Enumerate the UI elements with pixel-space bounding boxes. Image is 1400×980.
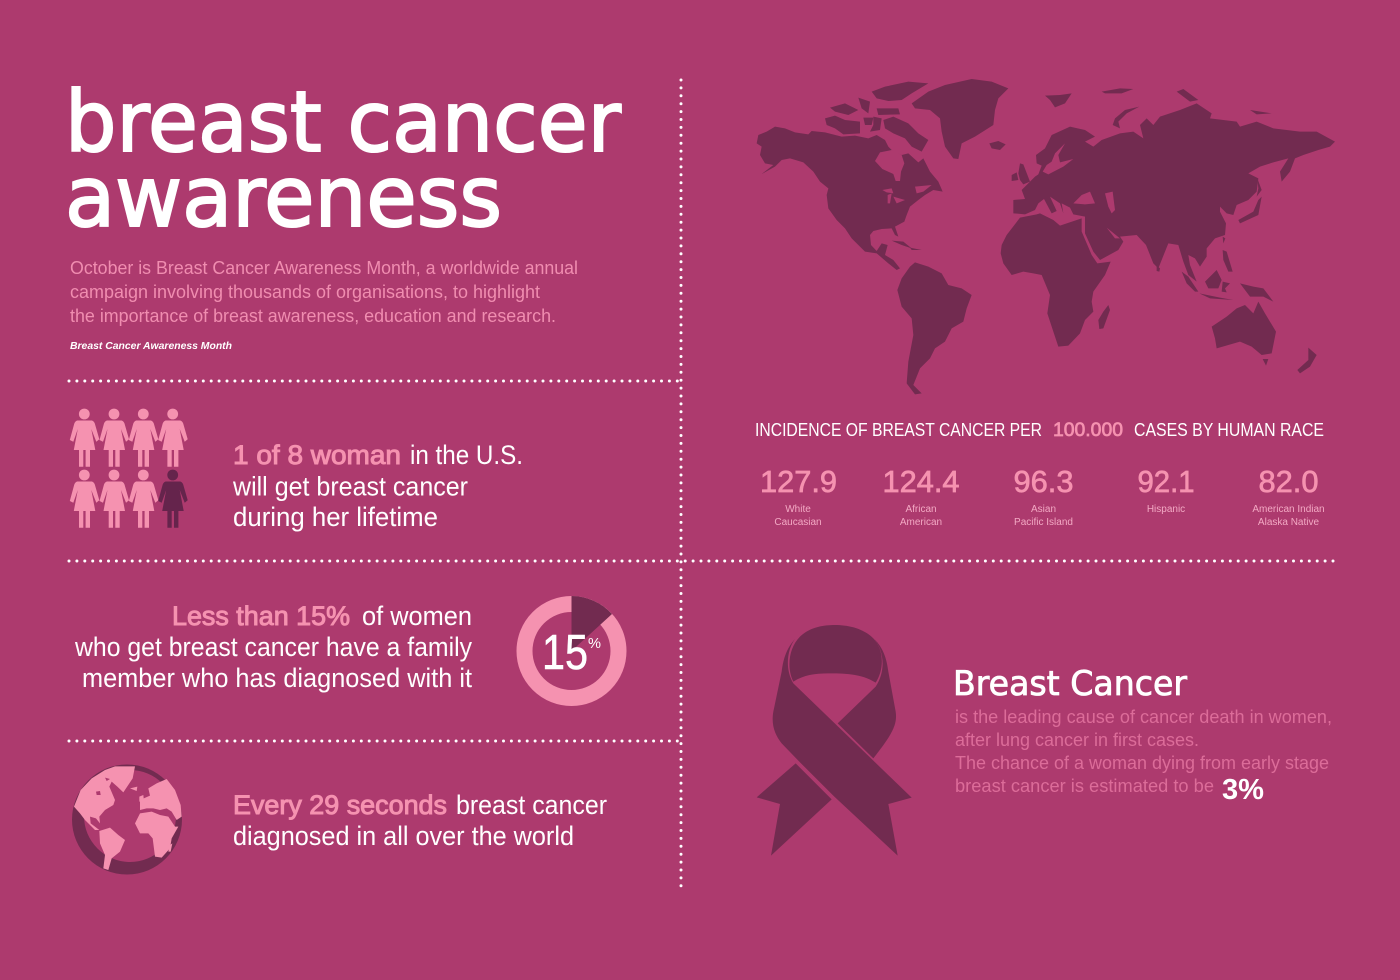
donut chart: 15 percent: [524, 596, 618, 698]
icon: globe: [72, 764, 182, 874]
incidence heading: [755, 420, 1324, 441]
stat: every 29 seconds: diagnosed in all over the world: [233, 821, 574, 851]
stat: less than 15 percent: of women: [362, 601, 472, 631]
stat: 1 of 8 women: 1 of 8 woman: [233, 440, 401, 470]
stat: african american: American: [900, 517, 942, 528]
donut chart: 15 percent: %: [588, 635, 601, 652]
title: awareness: [65, 148, 502, 246]
stat: african american: 124.4: [882, 464, 960, 499]
highlight: 3 percent: 3%: [1222, 774, 1264, 806]
stat: every 29 seconds: breast cancer: [456, 790, 607, 820]
title: breast cancer: [65, 73, 621, 171]
stat: american indian alaska native: 82.0: [1258, 464, 1318, 499]
breast cancer description: breast cancer is estimated to be: [955, 775, 1214, 796]
intro paragraph: campaign involving thousands of organisations, to highlight: [70, 282, 540, 302]
world map: [757, 79, 1335, 394]
donut chart: 15 percent: 15: [542, 626, 588, 680]
stat: asian pacific island: [1014, 464, 1074, 528]
icon: awareness ribbon: [757, 625, 912, 856]
stat: every 29 seconds: Every 29 seconds: [233, 790, 447, 820]
heading: breast cancer: Breast Cancer: [953, 664, 1187, 704]
breast cancer description: after lung cancer in first cases.: [955, 729, 1199, 750]
stat: 1 of 8 women: during her lifetime: [233, 502, 438, 532]
source note: Breast Cancer Awareness Month: [70, 340, 232, 352]
stat: american indian alaska native: American Indian: [1252, 504, 1325, 515]
stat: american indian alaska native: [1252, 464, 1325, 528]
intro paragraph: October is Breast Cancer Awareness Month, a worldwide annual: [70, 258, 578, 278]
stat: less than 15 percent: who get breast cancer have a family: [74, 632, 472, 662]
incidence heading: CASES BY HUMAN RACE: [1134, 420, 1324, 440]
stat: hispanic: Hispanic: [1147, 504, 1185, 515]
stat: 1 of 8 women: [232, 440, 523, 532]
stat: african american: African: [905, 504, 937, 515]
intro paragraph: the importance of breast awareness, education and research.: [70, 306, 556, 326]
title: [65, 73, 621, 246]
stat: 1 of 8 women: will get breast cancer: [232, 472, 468, 502]
stat: asian pacific island: Pacific Island: [1014, 517, 1073, 528]
stat: 1 of 8 women: in the U.S.: [410, 440, 523, 470]
incidence heading: 100.000: [1053, 420, 1123, 441]
stat: every 29 seconds: [233, 790, 607, 851]
stat: white caucasian: [760, 464, 837, 528]
stat: less than 15 percent: Less than 15%: [172, 601, 350, 631]
stat: american indian alaska native: Alaska Native: [1258, 517, 1320, 528]
stat: less than 15 percent: member who has diagnosed with it: [82, 663, 472, 693]
stat: hispanic: 92.1: [1138, 464, 1194, 499]
breast cancer description: The chance of a woman dying from early stage: [955, 752, 1329, 773]
stat: white caucasian: White: [785, 504, 811, 515]
stat: asian pacific island: Asian: [1031, 504, 1056, 515]
stat: hispanic: [1138, 464, 1194, 515]
stat: asian pacific island: 96.3: [1014, 464, 1074, 499]
stat: less than 15 percent: [74, 601, 472, 693]
stat: white caucasian: Caucasian: [774, 517, 822, 528]
breast cancer description: is the leading cause of cancer death in women,: [955, 706, 1332, 727]
stat: african american: [882, 464, 960, 528]
stat: white caucasian: 127.9: [760, 464, 837, 499]
icon: eight women, one highlighted: [70, 409, 188, 528]
breast cancer description: [955, 706, 1332, 796]
intro paragraph: [70, 258, 578, 326]
incidence heading: INCIDENCE OF BREAST CANCER PER: [755, 420, 1042, 440]
